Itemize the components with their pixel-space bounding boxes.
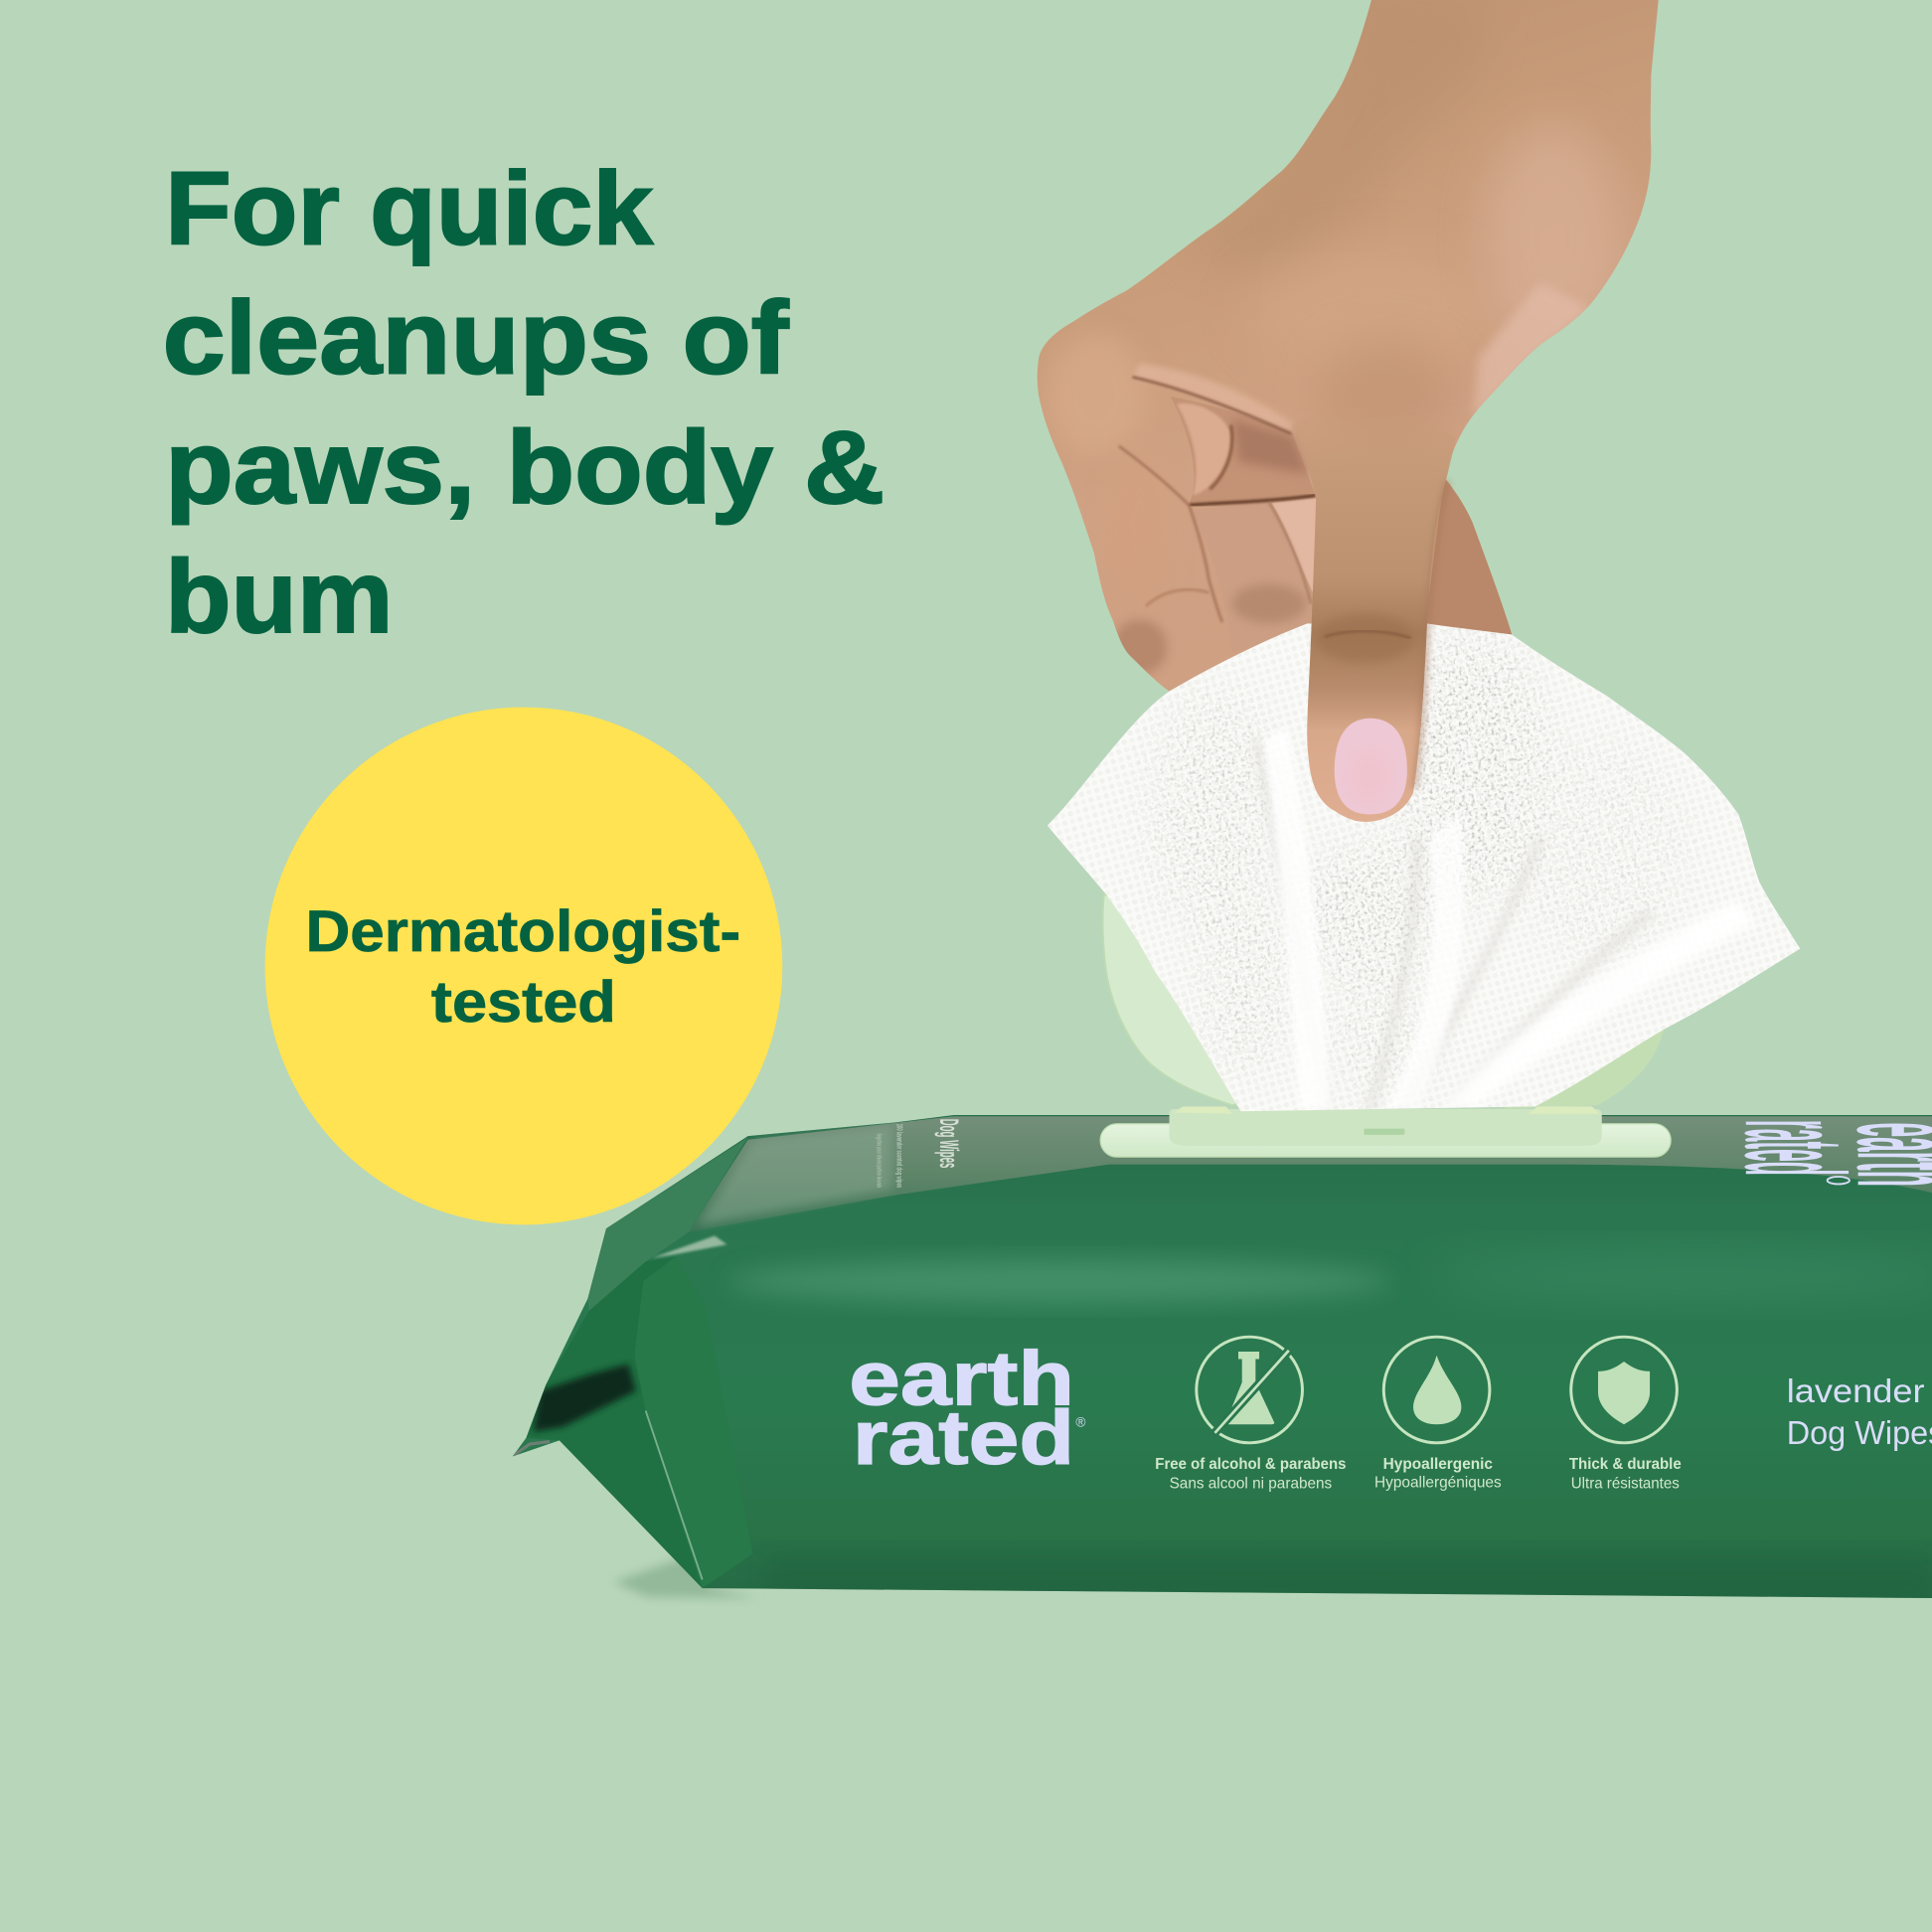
- sheen on top face, left: [698, 1125, 892, 1226]
- knuckle crease: [1146, 589, 1208, 606]
- title: cleanups of: [163, 281, 789, 397]
- crease on index finger: [1132, 377, 1291, 433]
- bright pleat right: [1386, 813, 1464, 1109]
- package front face: [493, 1109, 1932, 1602]
- back side panel: [587, 1137, 748, 1311]
- dispenser base plate: [1100, 1106, 1671, 1157]
- icon: hypoallergenic drop: [1383, 1337, 1490, 1443]
- brand logo on package: earth: [849, 1336, 1074, 1421]
- dark crease in the fold: [534, 1364, 636, 1432]
- thumb nail: [1335, 719, 1407, 815]
- package: lingettes pour chiens parfum lavande: [876, 1134, 885, 1188]
- soft fold middle: [1370, 838, 1417, 1109]
- curled finger hollow: [1171, 397, 1316, 505]
- far-right fold: [1454, 911, 1651, 1106]
- second glossy highlight: [1595, 1266, 1805, 1284]
- lit band of fold: [634, 1257, 753, 1588]
- main fold panel: [527, 1257, 702, 1588]
- bottom shading: [771, 1588, 1916, 1598]
- package top face: [689, 1116, 1932, 1232]
- lower fingers: [1193, 498, 1319, 653]
- callout: dermatologist-tested badge: tested: [431, 970, 616, 1035]
- package: 100 lavender scented dog wipes: [895, 1124, 905, 1188]
- feature label: free of alcohol: Sans alcool ni parabens: [1170, 1476, 1332, 1493]
- lighter pinky-side palm: [1473, 283, 1589, 419]
- package: [493, 1109, 1932, 1602]
- callout: dermatologist-tested badge: [265, 708, 782, 1224]
- feature label: thick and durable: Ultra résistantes: [1571, 1476, 1680, 1493]
- skin fold above crease: [1132, 364, 1294, 433]
- curled fingertip: [1177, 403, 1230, 495]
- registered mark on top face: [1828, 1177, 1850, 1184]
- thumb wrinkle line: [1325, 631, 1411, 638]
- shaded wrist edge: [1183, 0, 1491, 283]
- product name on package: lavender: [1787, 1373, 1925, 1410]
- bright sweep far right: [1442, 899, 1756, 1109]
- feature label: hypoallergenic: Hypoallergéniques: [1374, 1474, 1502, 1491]
- callout: dermatologist-tested badge: Dermatologist-: [305, 899, 740, 964]
- lower edge shade: [1113, 620, 1167, 674]
- thumb nail highlight: [1348, 749, 1392, 803]
- soft fold left: [1257, 739, 1325, 1109]
- back of hand: [1023, 0, 1676, 703]
- hollow shadow: [1232, 419, 1309, 474]
- thumb knuckle wrinkles: [1316, 613, 1414, 663]
- title: bum: [165, 540, 393, 655]
- hand: [1023, 0, 1811, 1121]
- package: Dog Wipes: [934, 1119, 965, 1168]
- bright pleat left: [1263, 726, 1331, 1109]
- brand logo on package: rated: [853, 1395, 1074, 1481]
- palm side highlight: [1485, 123, 1620, 345]
- title: For quick: [165, 151, 654, 266]
- package: rated: [1715, 1120, 1873, 1176]
- brand logo on package: [849, 1336, 1085, 1481]
- divider of lower fingers: [1269, 503, 1311, 604]
- glossy highlight band: [726, 1259, 1392, 1304]
- brand logo on package: ®: [1075, 1415, 1085, 1430]
- wipe: [1035, 616, 1811, 1121]
- icon: durable shield: [1571, 1337, 1677, 1443]
- top fold highlight: [652, 1236, 726, 1258]
- icon: no alcohol flask: [1197, 1337, 1302, 1443]
- grey speckled fibres: [1035, 616, 1811, 1121]
- dispenser lid, open behind the wipe: [1103, 894, 1665, 1109]
- product name on package: [1787, 1373, 1932, 1452]
- feature label: thick and durable: Thick & durable: [1569, 1456, 1682, 1473]
- fingertip shadow: [1189, 495, 1316, 505]
- feature label: free of alcohol: [1155, 1456, 1346, 1493]
- lower finger knuckle tone: [1232, 584, 1306, 623]
- feature label: free of alcohol: Free of alcohol & parabens: [1155, 1456, 1346, 1473]
- index finger inner edge: [1119, 446, 1222, 622]
- light crease line: [646, 1411, 703, 1579]
- frayed tip of fold: [514, 1442, 550, 1455]
- title: paws, body &: [165, 410, 885, 526]
- ground shadow under package: [613, 1555, 757, 1598]
- feature label: thick and durable: [1569, 1456, 1682, 1493]
- pinky finger behind thumb: [1423, 478, 1518, 641]
- index finger knuckle: [1047, 333, 1146, 456]
- soft fold right: [1404, 838, 1540, 1109]
- thumb: [1291, 395, 1456, 822]
- fingertip side shadow: [1209, 425, 1232, 489]
- second lower finger: [1271, 498, 1319, 604]
- knuckle highlight: [1244, 246, 1491, 370]
- index finger side: [1105, 456, 1175, 604]
- feature label: hypoallergenic: Hypoallergenic: [1383, 1456, 1493, 1473]
- thumb-web shading: [1319, 339, 1454, 450]
- feature label: hypoallergenic: [1374, 1456, 1502, 1491]
- title: [163, 151, 885, 655]
- brand name foreshortened on top face: [876, 1119, 1932, 1188]
- thumb right shade: [1414, 481, 1448, 788]
